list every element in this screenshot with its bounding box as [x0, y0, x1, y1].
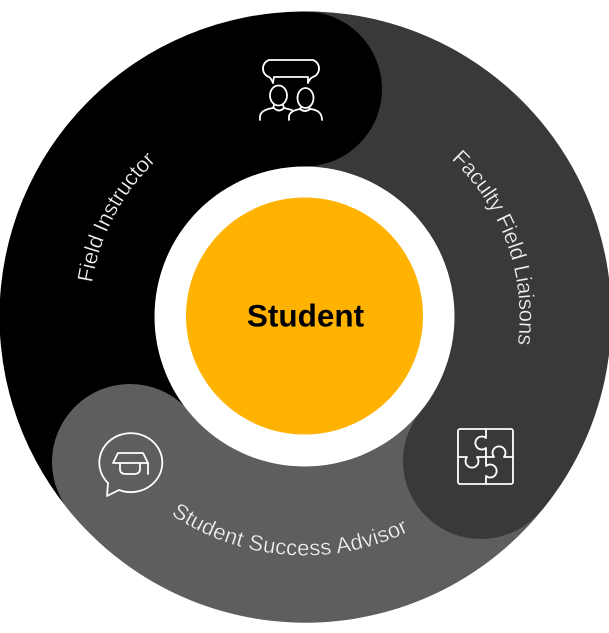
centre circle: Student — [186, 198, 423, 434]
icon: two people with speech bubble — [260, 60, 322, 120]
centre circle: Student: Student — [247, 298, 365, 334]
icon: puzzle — [458, 429, 513, 484]
panel: Faculty Field Liaisons dark segment — [304, 11, 609, 539]
white centre ring — [154, 166, 454, 466]
label: Student Success Advisor: Student Success Advisor — [173, 504, 406, 556]
segment cap: Student Success Advisor — [52, 384, 208, 540]
label: Field Instructor: Field Instructor — [78, 152, 154, 282]
panel: Student Success Advisor grey segment — [70, 316, 542, 623]
label: Faculty Field Liaisons: Faculty Field Liaisons — [452, 150, 535, 344]
segment cap: Field Instructor — [227, 12, 382, 166]
icon: speech bubble with graduation cap — [99, 433, 162, 496]
